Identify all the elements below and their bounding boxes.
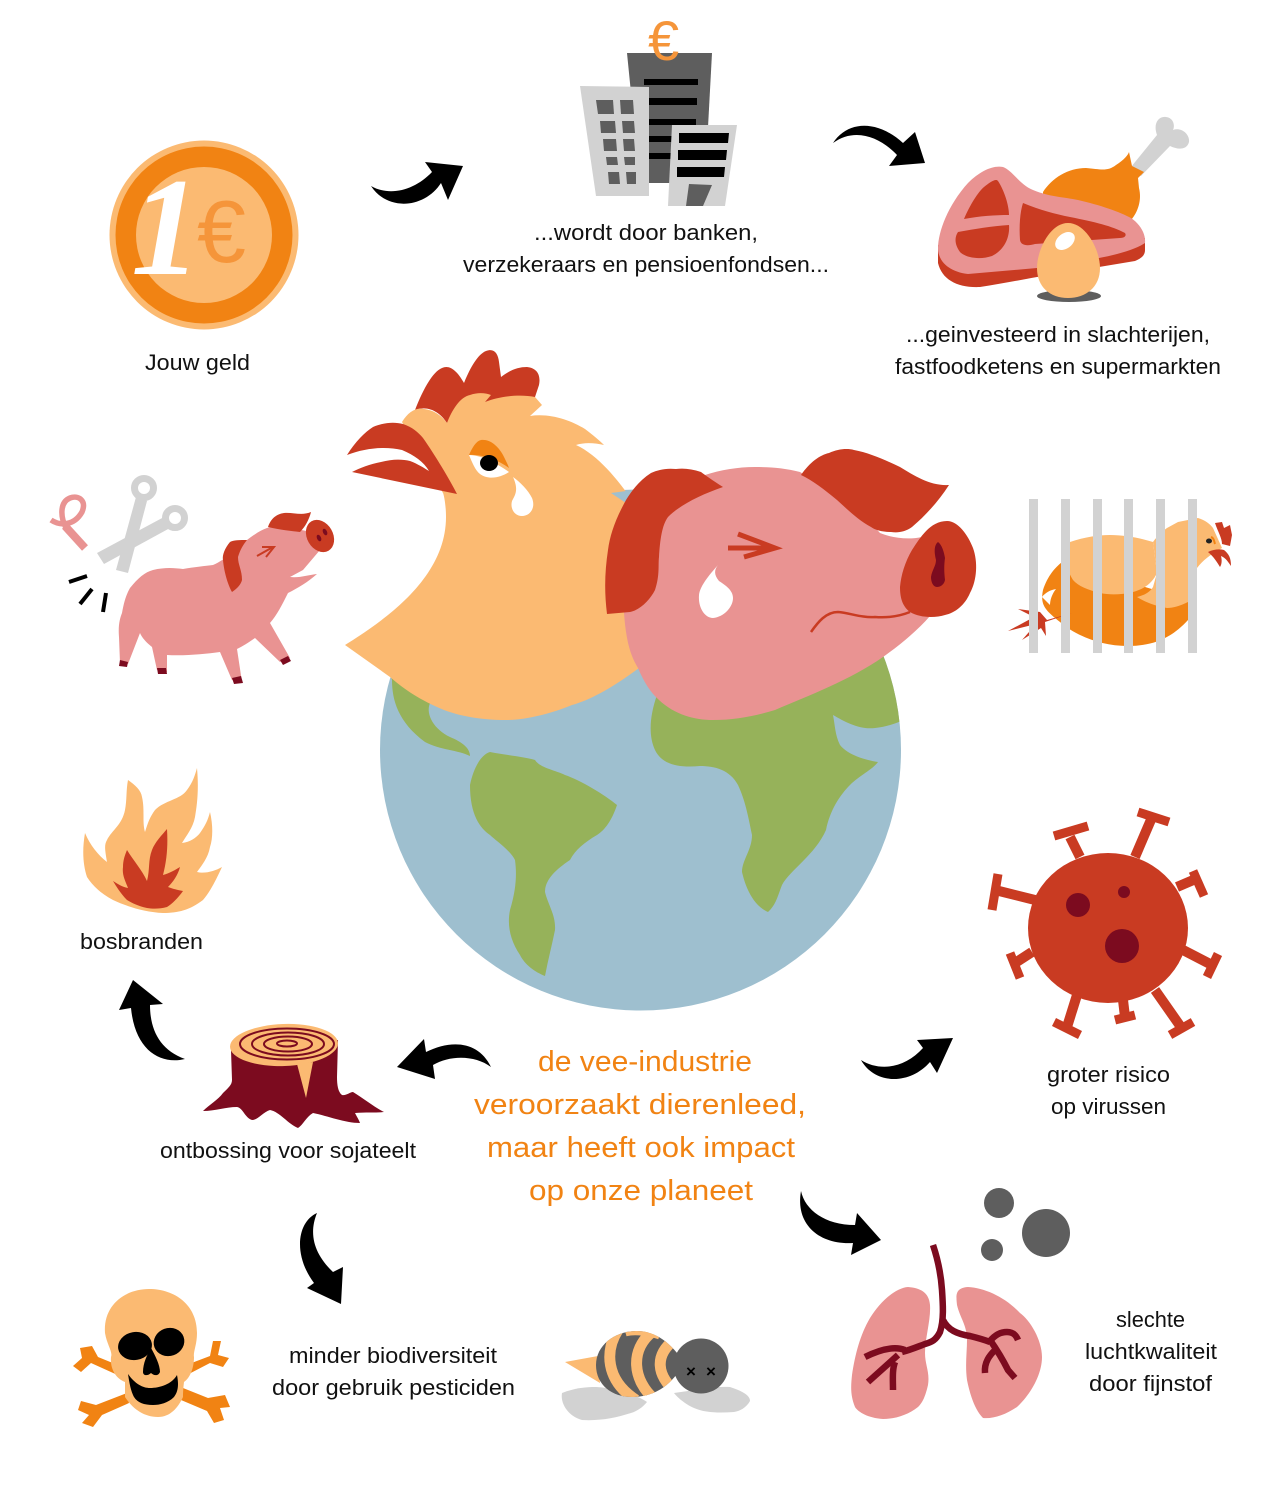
icon: skull and crossbones: [73, 1289, 230, 1427]
icon: dead bee: [562, 1330, 750, 1420]
text: banks caption: ...wordt door banken,: [534, 220, 758, 245]
icon: euro coin: [110, 140, 298, 330]
text: biodiversity caption: minder biodiversiteit: [289, 1343, 497, 1368]
arrow: banks to meat: [833, 126, 925, 166]
text: ontbossing caption: ontbossing voor sojateelt: [160, 1138, 416, 1163]
arrow: center to virus: [861, 1038, 953, 1079]
arrow: stump to biodiversity: [300, 1213, 343, 1304]
text: lungs caption: [1085, 1307, 1217, 1396]
illustration: crying chicken head: [345, 350, 650, 720]
icon: bank buildings: €: [648, 9, 679, 72]
text: banks caption: verzekeraars en pensioenfondsen...: [463, 252, 829, 277]
icon: globe: [380, 490, 903, 1010]
text: main statement: de vee-industrie: [538, 1046, 752, 1078]
text: meat caption: fastfoodketens en supermarkten: [895, 354, 1221, 379]
icon: virus: [992, 812, 1218, 1035]
icon: bank buildings: [580, 9, 737, 206]
text: lungs caption: slechte: [1116, 1307, 1185, 1332]
icon: particulate matter: [981, 1188, 1070, 1261]
icon: caged chicken: [1008, 499, 1232, 653]
text: main statement: op onze planeet: [529, 1175, 753, 1207]
text: Jouw geld: Jouw geld: [145, 350, 250, 375]
text: main statement: [474, 1046, 806, 1207]
arrow: coin to banks: [371, 162, 463, 204]
icon: dead bee: ×: [686, 1362, 696, 1381]
icon: euro coin: €: [197, 182, 246, 281]
text: biodiversity caption: door gebruik pesticiden: [272, 1375, 515, 1400]
icon: forest fire: [83, 768, 222, 913]
arrow: center to stump: [397, 1039, 491, 1079]
text: virus caption: op virussen: [1051, 1094, 1166, 1119]
icon: meat, chicken leg and egg: [938, 117, 1189, 302]
text: main statement: maar heeft ook impact: [487, 1132, 795, 1164]
text: biodiversity caption: [272, 1343, 515, 1400]
text: lungs caption: door fijnstof: [1089, 1371, 1213, 1396]
text: meat caption: ...geinvesteerd in slachterijen,: [906, 322, 1210, 347]
text: main statement: veroorzaakt dierenleed,: [474, 1089, 806, 1121]
text: lungs caption: luchtkwaliteit: [1085, 1339, 1217, 1364]
icon: tree stump: [203, 1022, 384, 1128]
icon: pain marks: [69, 576, 106, 612]
icon: lungs: [851, 1245, 1042, 1419]
icon: euro coin: 1: [131, 150, 201, 305]
icon: scissors and cut tail: [51, 478, 184, 573]
illustration: pig with docked tail: [119, 512, 340, 684]
illustration: crying pig head: [605, 449, 976, 720]
text: virus caption: groter risico: [1047, 1062, 1170, 1087]
arrow: stump to fire: [119, 980, 185, 1060]
arrow: center to lungs: [800, 1191, 881, 1255]
text: meat caption: [895, 322, 1221, 379]
text: virus caption: [1047, 1062, 1170, 1119]
text: bosbranden: bosbranden: [80, 929, 203, 954]
icon: dead bee: ×: [706, 1362, 716, 1381]
text: banks caption: [463, 220, 829, 277]
